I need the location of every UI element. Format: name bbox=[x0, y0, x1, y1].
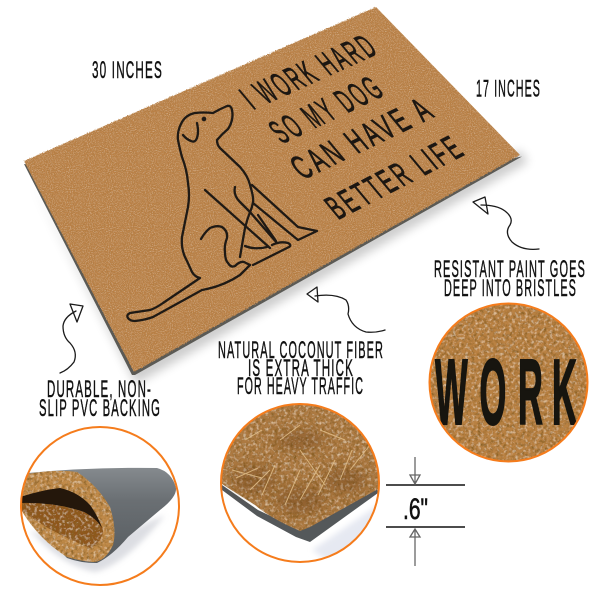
circle: rolled mat backing bbox=[20, 427, 179, 585]
text: 30 INCHES bbox=[92, 57, 163, 84]
word WORK: WORK bbox=[435, 340, 577, 444]
fibers bbox=[220, 403, 380, 531]
mat coir surface bbox=[24, 7, 520, 372]
arrow: to backing bbox=[60, 304, 83, 373]
text: NATURAL COCONUT FIBER bbox=[218, 337, 384, 364]
caption: resistant paint bbox=[434, 256, 586, 302]
arrow: to coconut fiber bbox=[307, 287, 385, 332]
caption: pvc backing: DURABLE, NON- bbox=[47, 376, 152, 403]
mat slogan: SO MY DOG bbox=[261, 68, 393, 150]
mat slogan: BETTER LIFE bbox=[317, 128, 473, 226]
mat shadow bbox=[30, 150, 528, 384]
dog line drawing bbox=[127, 106, 317, 321]
mat backing edge bbox=[24, 156, 522, 375]
top arrow bbox=[410, 457, 420, 484]
thickness dimension bbox=[386, 457, 465, 566]
arrow: to paint bbox=[473, 197, 539, 249]
caption: coconut fiber bbox=[218, 337, 384, 400]
inner coir bbox=[20, 501, 103, 548]
thickness value: .6" bbox=[403, 493, 428, 526]
fiber shading bbox=[233, 431, 367, 514]
mat slogan: CAN HAVE A bbox=[282, 90, 443, 186]
doormat bbox=[24, 7, 528, 384]
dark hollow bbox=[20, 488, 102, 528]
caption: pvc backing bbox=[39, 376, 161, 422]
caption: coconut fiber: FOR HEAVY TRAFFIC bbox=[237, 373, 364, 400]
shadow under roll bbox=[30, 515, 165, 572]
coir rim bbox=[20, 471, 114, 562]
light fiber strands bbox=[232, 425, 370, 505]
gray backing bbox=[28, 468, 176, 563]
surface beneath bbox=[314, 507, 374, 558]
caption: coconut fiber: IS EXTRA THICK bbox=[248, 355, 354, 382]
circle: painted WORK close-up bbox=[428, 302, 590, 464]
text: SLIP PVC BACKING bbox=[39, 395, 161, 422]
pvc base bbox=[222, 485, 378, 542]
bottom arrow bbox=[410, 529, 420, 566]
circle: thick fiber close-up bbox=[220, 403, 385, 570]
mat slogan bbox=[232, 27, 473, 226]
